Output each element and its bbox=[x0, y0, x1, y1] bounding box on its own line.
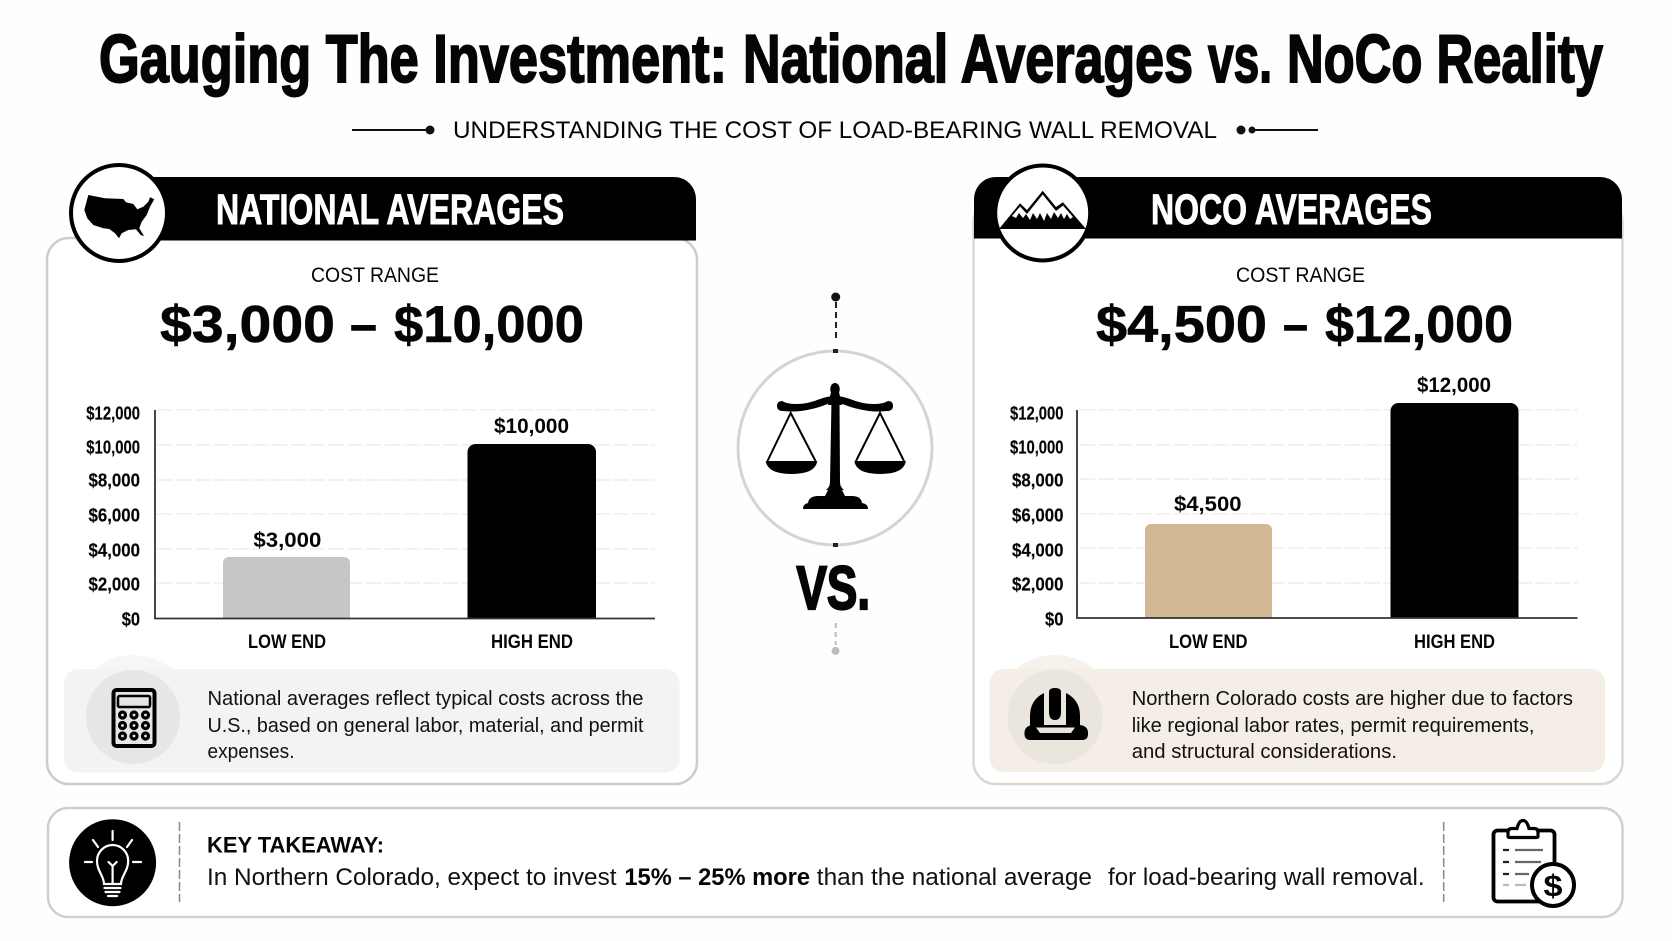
value: high: $10,000 bbox=[494, 415, 569, 438]
note text: noco: Northern Colorado costs are higher due to factors bbox=[1132, 687, 1573, 710]
title: Gauging The Investment: bbox=[99, 21, 727, 97]
cost range value: $3,000 bbox=[160, 296, 335, 354]
y axis labels: $12,000 bbox=[86, 404, 140, 424]
note text: noco: like regional labor rates, permit requirements, bbox=[1132, 714, 1534, 737]
bar: high end bbox=[1390, 403, 1518, 618]
note text: national: U.S., based on general labor, material, and permit bbox=[208, 714, 644, 737]
bar: high end bbox=[468, 444, 596, 618]
y axis labels: $2,000 bbox=[1012, 574, 1064, 594]
y axis labels bbox=[1010, 404, 1064, 630]
bar chart: noco bbox=[1010, 374, 1578, 653]
key takeaway sentence: for load-bearing wall removal. bbox=[1108, 864, 1425, 891]
cost range value: – bbox=[1283, 296, 1308, 354]
cost range value bbox=[160, 296, 584, 354]
bar: low end bbox=[223, 557, 350, 618]
note text: noco bbox=[1132, 687, 1573, 763]
cost range value: $4,500 bbox=[1096, 296, 1267, 354]
title: vs. bbox=[1208, 21, 1272, 97]
category: low end: LOW END bbox=[1169, 632, 1248, 653]
y axis labels: $0 bbox=[1045, 610, 1064, 630]
y axis labels: $4,000 bbox=[88, 540, 140, 560]
header bar: noco bbox=[974, 177, 1622, 238]
icon: balance scales bbox=[766, 383, 906, 509]
value: low: $3,000 bbox=[253, 529, 321, 552]
heading: national averages: NATIONAL AVERAGES bbox=[216, 186, 564, 234]
bar chart: national bbox=[86, 404, 655, 653]
label: cost range: COST RANGE bbox=[1236, 264, 1365, 287]
category: high end: HIGH END bbox=[491, 632, 573, 653]
key takeaway sentence bbox=[207, 864, 1425, 891]
y axis labels bbox=[86, 404, 140, 630]
title: National Averages bbox=[743, 21, 1193, 97]
y axis labels: $2,000 bbox=[88, 574, 140, 594]
y axis labels: $10,000 bbox=[86, 438, 140, 458]
label: VS.: VS. bbox=[796, 554, 870, 622]
note box: noco bbox=[990, 655, 1605, 772]
y axis labels: $6,000 bbox=[88, 506, 140, 526]
cost range value: – bbox=[350, 296, 377, 354]
panel: key takeaway bbox=[48, 808, 1622, 917]
y axis labels: $6,000 bbox=[1012, 506, 1064, 526]
heading: noco averages: NOCO AVERAGES bbox=[1151, 186, 1432, 234]
note text: national: National averages reflect typical costs across the bbox=[208, 687, 644, 710]
value: high: $12,000 bbox=[1417, 374, 1491, 397]
y axis labels: $8,000 bbox=[1012, 470, 1064, 490]
cost range value: $10,000 bbox=[394, 296, 584, 354]
key takeaway sentence: than the national average bbox=[817, 864, 1092, 891]
value: low: $4,500 bbox=[1174, 493, 1242, 516]
y axis labels: $4,000 bbox=[1012, 540, 1064, 560]
y axis labels: $8,000 bbox=[88, 470, 140, 490]
scales badge bbox=[738, 349, 932, 547]
icon: clipboard with dollar: $ bbox=[1544, 868, 1562, 903]
category: low end: LOW END bbox=[248, 632, 326, 653]
key takeaway sentence: 15% – 25% more bbox=[624, 864, 810, 891]
icon: mountains bbox=[995, 166, 1090, 260]
note box: national bbox=[64, 655, 680, 772]
category: high end: HIGH END bbox=[1414, 632, 1495, 653]
y axis labels: $0 bbox=[122, 610, 140, 630]
subtitle: UNDERSTANDING THE COST OF LOAD-BEARING WALL REMOVAL bbox=[453, 117, 1217, 144]
note text: noco: and structural considerations. bbox=[1132, 740, 1397, 763]
note text: national: expenses. bbox=[208, 740, 294, 763]
icon: light bulb bbox=[69, 819, 156, 906]
header bar: national bbox=[130, 177, 696, 240]
icon: hard hat bbox=[1024, 688, 1088, 740]
center: versus bbox=[738, 292, 932, 655]
cost range value bbox=[1096, 296, 1513, 354]
key takeaway sentence: In Northern Colorado, expect to invest bbox=[207, 864, 617, 891]
icon: clipboard with dollar bbox=[1494, 820, 1574, 906]
panel: national averages bbox=[47, 165, 697, 784]
note text: national bbox=[208, 687, 644, 763]
icon: calculator bbox=[114, 690, 154, 746]
y axis labels: $10,000 bbox=[1010, 438, 1064, 458]
panel: noco averages bbox=[974, 166, 1622, 784]
y axis labels: $12,000 bbox=[1010, 404, 1064, 424]
icon: USA map bbox=[71, 165, 167, 261]
key takeaway heading: KEY TAKEAWAY: bbox=[207, 833, 384, 858]
title bbox=[99, 21, 1603, 97]
bar: low end bbox=[1145, 524, 1272, 618]
label: cost range: COST RANGE bbox=[311, 264, 439, 287]
cost range value: $12,000 bbox=[1325, 296, 1513, 354]
